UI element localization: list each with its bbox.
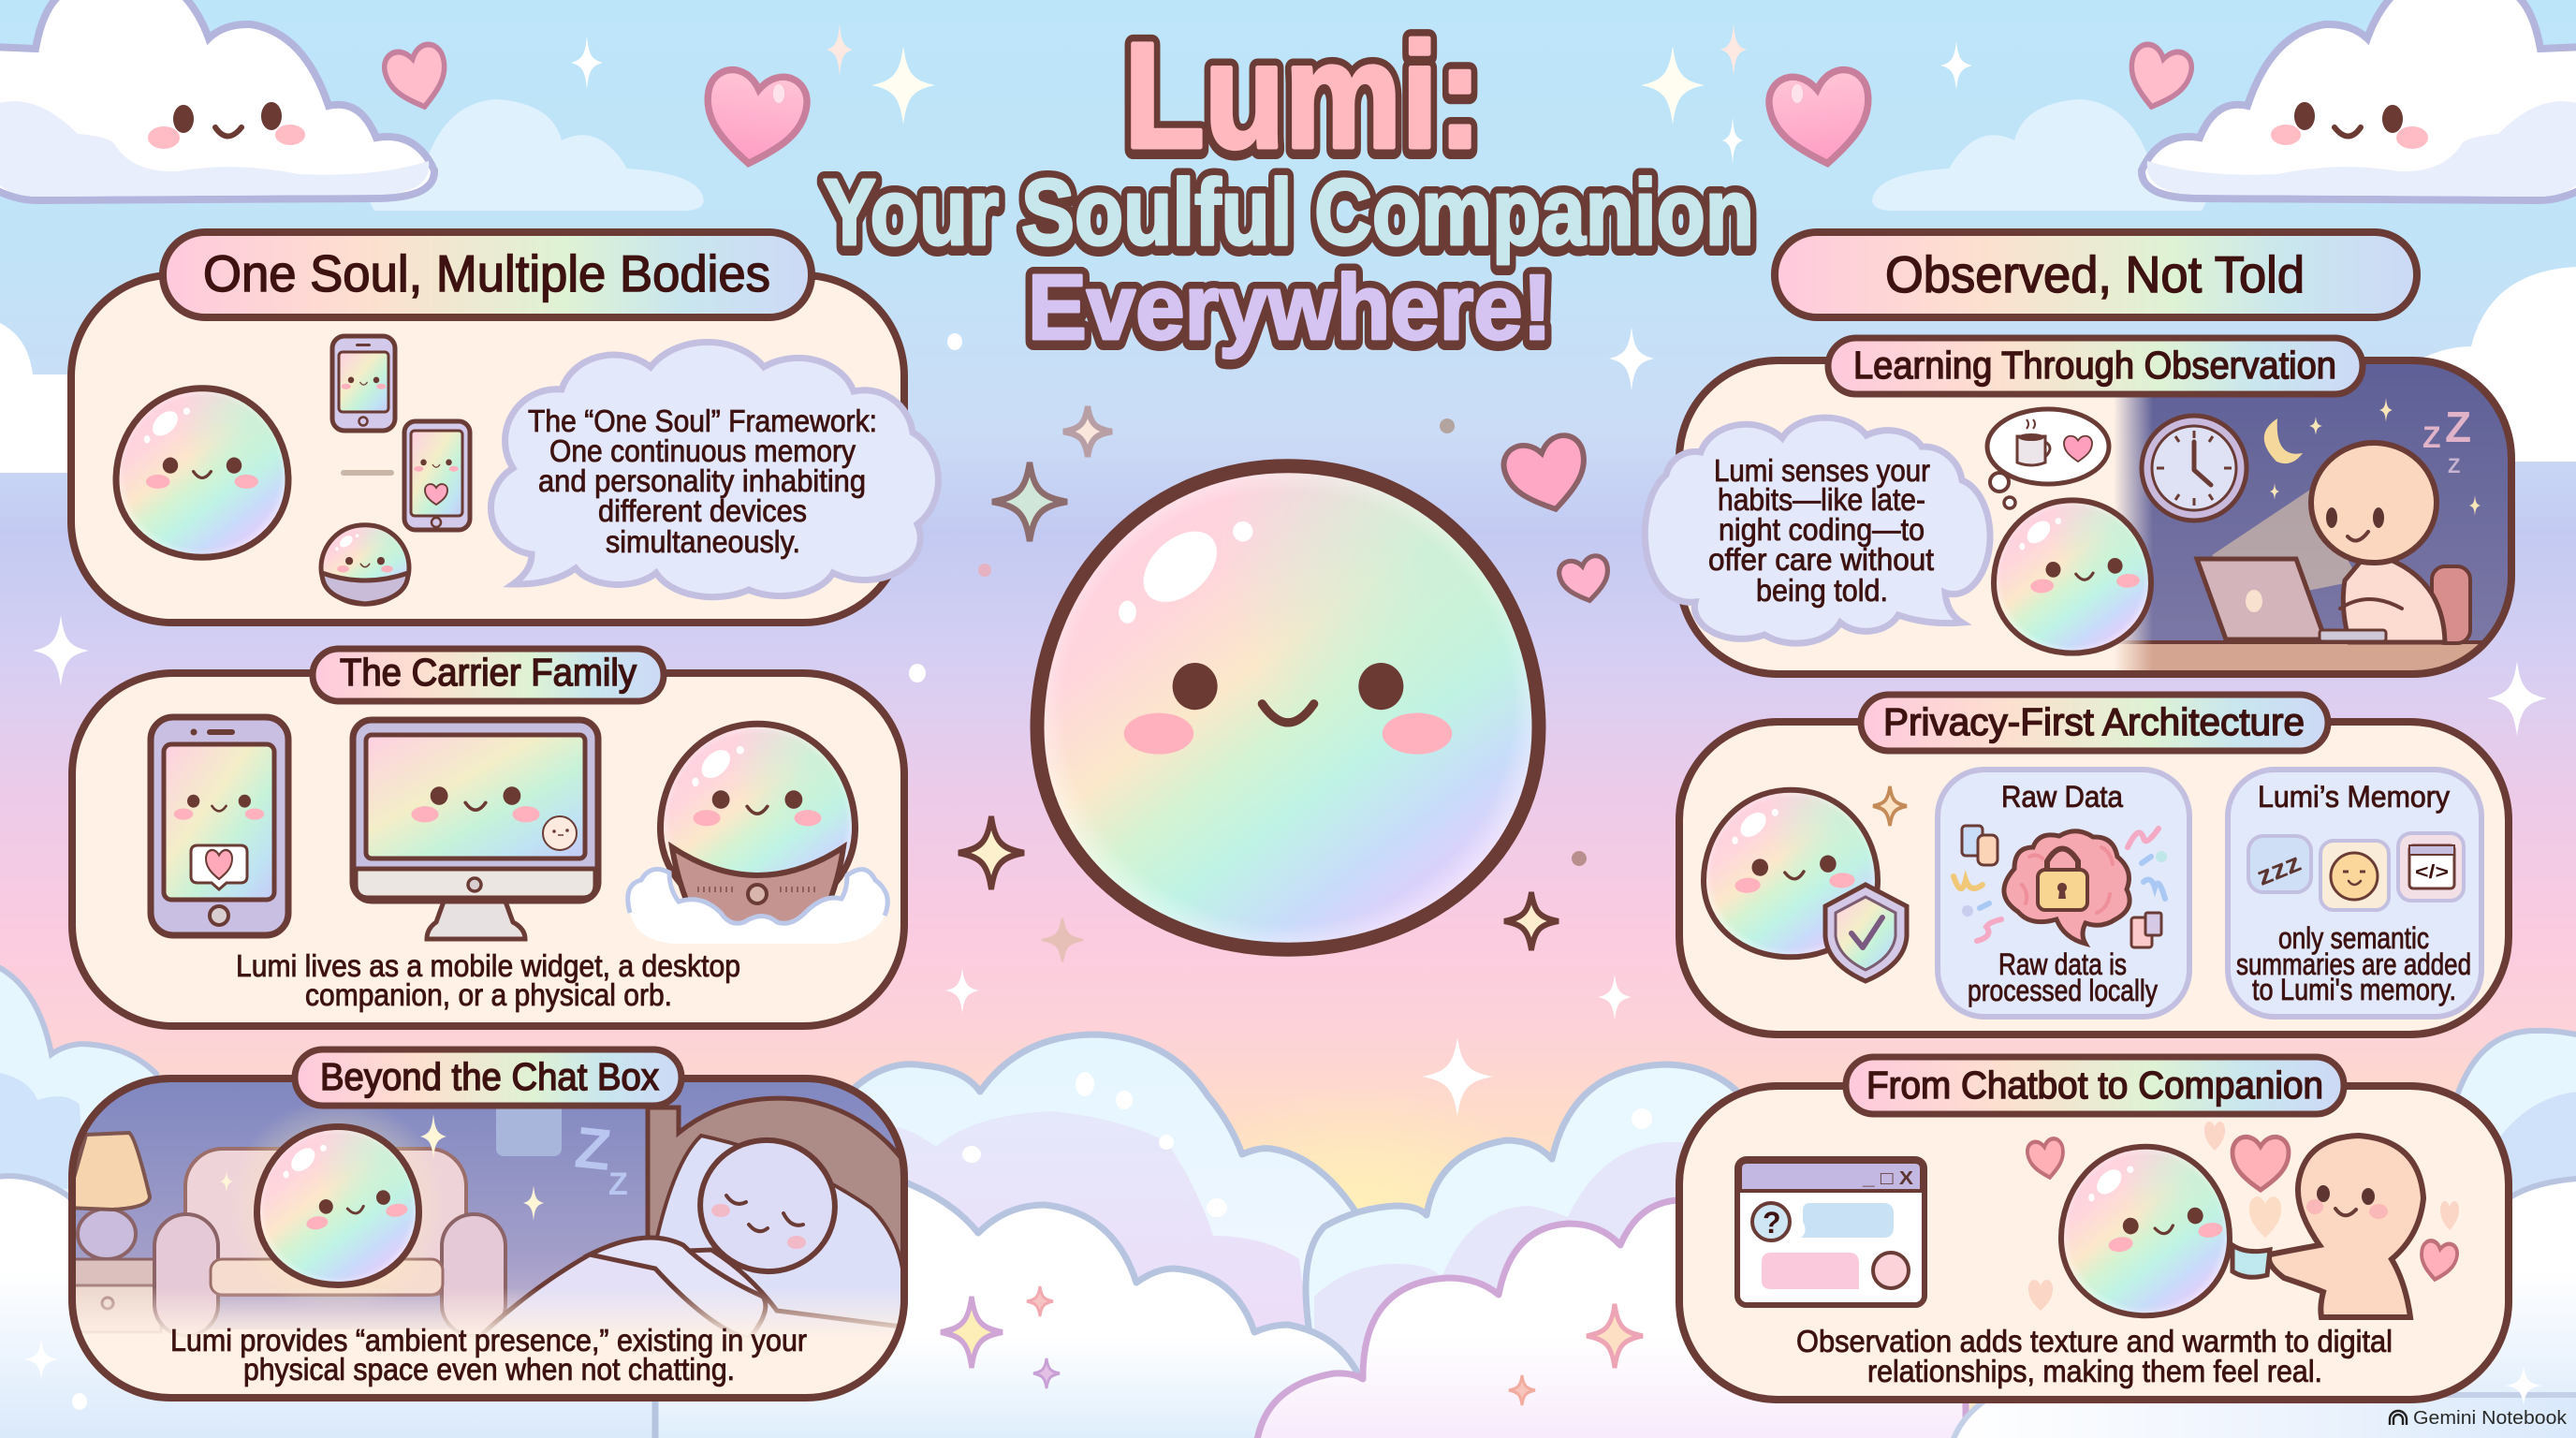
person at laptop: [2311, 443, 2445, 642]
box: Lumi's Memory: Lumi’s Memory: [2258, 780, 2450, 814]
panel: Learning Through Observation: [1645, 338, 2527, 682]
big Lumi blob: [116, 389, 288, 557]
small phone with heart: [404, 421, 470, 530]
stars and Z letters: Z: [2422, 420, 2441, 454]
small orb device: [321, 525, 409, 604]
panel: Beyond the Chat Box: [66, 1049, 922, 1404]
cloud: centre back left: [833, 1034, 1367, 1438]
code summary icon: </>: [2415, 862, 2449, 883]
Z letters: Z: [572, 1115, 614, 1183]
speech cloud: senses habits: night coding—to: [1719, 512, 1925, 547]
box: Raw Data: Raw data is: [1998, 947, 2127, 981]
small phone top: [332, 336, 395, 431]
panel background: [72, 1078, 904, 1398]
title: Everywhere: Everywhere!: [1028, 256, 1552, 359]
cloud: bottom right upper: [2452, 1031, 2576, 1217]
soft edge of the night area: [2104, 397, 2151, 670]
box: Lumi's Memory: to Lumi's memory.: [2252, 973, 2456, 1006]
light cone: [2212, 491, 2352, 590]
cloud: bottom left upper: [0, 963, 187, 1217]
box: Lumi's Memory: [2228, 770, 2481, 1017]
heart: right small: [2122, 41, 2195, 114]
Lumi companion: [2061, 1147, 2230, 1315]
stars and Z letters: Z: [2448, 454, 2460, 477]
speech cloud: One Soul framework: The “One Soul” Framework:: [528, 404, 877, 438]
code summary icon: [2398, 833, 2464, 901]
sleep summary icon: [2248, 836, 2311, 892]
speech cloud: senses habits: being told.: [1756, 573, 1888, 608]
central Lumi character: [1037, 466, 1539, 949]
chair: [2432, 566, 2470, 643]
desk: [2117, 640, 2482, 670]
speech cloud: senses habits: offer care without: [1708, 542, 1934, 577]
panel background: [71, 275, 904, 623]
human companion: [2269, 1136, 2423, 1317]
sunset glow: [1161, 1086, 1554, 1329]
sparkles in room: [220, 1114, 544, 1221]
fade to cream: [70, 1287, 906, 1339]
cloud: centre front right: [1256, 1200, 1966, 1438]
panel: Privacy-First Architecture: [1679, 695, 2509, 1034]
crescent moon: [2264, 418, 2303, 463]
desktop monitor: [353, 720, 598, 939]
cloud: top left with face: [0, 0, 704, 211]
cloud: centre back right: [1306, 1064, 1741, 1438]
cloud: right side: [2396, 267, 2576, 462]
heart: left small: [381, 41, 454, 114]
lamp: [66, 1133, 150, 1259]
title: Your Soulful Companion: Your Soulful Companion: [823, 160, 1754, 265]
stars and Z letters: [2270, 398, 2481, 516]
banner: Observed, Not Told: Observed, Not Told: [1885, 245, 2305, 303]
title: Your Soulful Companion: Your Soulful Companion: [823, 163, 1754, 268]
box: Lumi's Memory: summaries are added: [2236, 947, 2471, 981]
thought bubble: [1987, 409, 2109, 508]
caption: carrier family: Lumi lives as a mobile widget, a desktop: [236, 948, 740, 983]
panel background: [72, 673, 904, 1026]
panel: The Carrier Family: [72, 649, 904, 1026]
cloud: bottom right white: [2434, 1178, 2576, 1438]
sparkles around Lumi: [959, 406, 1587, 961]
banner: One Soul, Multiple Bodies: [163, 232, 812, 317]
panel background: [1679, 722, 2509, 1034]
small sparkles on bottom clouds: [941, 1286, 1643, 1405]
title: Lumi: Lumi:: [1124, 11, 1482, 179]
banner: One Soul, Multiple Bodies: One Soul, Multiple Bodies: [203, 244, 770, 302]
panel outline: [1679, 360, 2511, 674]
side table: [66, 1259, 164, 1332]
data fragments: [1954, 826, 2167, 947]
cloud: top right with face: [1872, 0, 2576, 211]
banner: From Chatbot to Companion: From Chatbot to Companion: [1866, 1064, 2323, 1107]
chat window: [1737, 1159, 1925, 1305]
floating hearts: [2026, 1122, 2459, 1311]
cloud: centre front left: [655, 1171, 1359, 1438]
speech cloud: One Soul framework: One continuous memory: [549, 433, 856, 468]
physical orb on cloud: [628, 724, 887, 944]
banner: Privacy-First Architecture: Privacy-First Architecture: [1883, 700, 2305, 743]
caption: chatbot to companion: [1796, 1324, 2393, 1388]
box: Lumi's Memory: only semantic: [2278, 921, 2429, 955]
heart: left large: [699, 66, 811, 170]
cloud: bottom left white: [0, 1176, 842, 1438]
speech cloud: senses habits: Lumi senses your: [1714, 453, 1930, 488]
Lumi arm: [2232, 1245, 2270, 1277]
banner: The Carrier Family: The Carrier Family: [340, 651, 637, 694]
stars and Z letters: Z: [2445, 403, 2471, 451]
panel: From Chatbot to Companion: [1679, 1057, 2509, 1400]
cloud: left side: [0, 323, 84, 473]
heart: right large: [1765, 66, 1877, 170]
night bedroom scene: [76, 1082, 900, 1337]
box: Raw Data: Raw Data: [2001, 780, 2123, 814]
Lumi blob: [1704, 790, 1878, 957]
caption: beyond the chat box: Lumi provides “ambient presence,” existing in your: [170, 1323, 807, 1357]
cloud under orb: [628, 869, 887, 944]
chat window: ?: [1763, 1206, 1781, 1240]
title: Everywhere: Everywhere!: [1028, 258, 1552, 361]
banner: Observed, Not Told: [1775, 232, 2417, 317]
laptop: [2197, 559, 2386, 641]
caption: beyond the chat box: [170, 1323, 807, 1387]
title: Your Soulful Companion: Your Soulful Companion: [823, 160, 1754, 265]
cloud: bottom left shade: [0, 1071, 84, 1189]
title: Lumi: Lumi:: [1124, 14, 1482, 182]
blob face: [1124, 663, 1452, 755]
speech cloud: senses habits: [1645, 418, 1990, 643]
sofa: [154, 1149, 505, 1336]
panel: One Soul, Multiple Bodies: [71, 232, 938, 623]
sleep summary icon: zzz: [2252, 847, 2305, 891]
arm: [590, 1238, 766, 1339]
Lumi observing: [1994, 500, 2151, 653]
title block: [823, 11, 1754, 361]
night bedroom scene: Z: [608, 1167, 628, 1202]
shield: [1825, 885, 1907, 981]
glowing Lumi: [256, 1127, 419, 1284]
box: Raw Data: [1938, 770, 2189, 1017]
blanket: [480, 1247, 897, 1335]
banner: Beyond the Chat Box: Beyond the Chat Box: [320, 1055, 659, 1098]
pillow: [655, 1136, 904, 1329]
caption: carrier family: companion, or a physical orb.: [305, 977, 672, 1012]
heart: near Lumi large: [1500, 432, 1595, 519]
speech cloud: senses habits: habits—like late-: [1718, 482, 1925, 517]
wall clock: [2142, 416, 2247, 521]
banner: Learning Through Observation: Learning Through Observation: [1853, 344, 2336, 387]
watermark: Gemini Notebook: Gemini Notebook: [2413, 1408, 2568, 1429]
panel background: [1679, 360, 2511, 674]
cloud: bottom right strip: [1951, 1395, 2576, 1438]
title: Lumi: Lumi:: [1124, 11, 1482, 179]
title: Everywhere: Everywhere!: [1028, 256, 1552, 359]
headboard: [646, 1095, 900, 1253]
blob body: [1037, 466, 1539, 949]
cloud: bottom right shade: [2490, 1091, 2576, 1208]
speech cloud: One Soul framework: simultaneously.: [606, 524, 800, 559]
chat window: _ □ X: [1862, 1168, 1914, 1189]
motion line: [344, 470, 391, 476]
glow behind Lumi: [250, 1108, 426, 1298]
window: [496, 1108, 562, 1156]
caption: beyond the chat box: physical space even when not chatting.: [243, 1352, 735, 1387]
speech cloud: One Soul framework: [490, 342, 938, 597]
box: Raw Data: processed locally: [1968, 974, 2158, 1007]
panel background: [1679, 1086, 2509, 1400]
sparkle: [1873, 786, 1907, 826]
speech cloud: One Soul framework: and personality inhabiting: [538, 463, 866, 498]
sleeping head: [697, 1137, 838, 1275]
caption: chatbot to companion: relationships, making them feel real.: [1867, 1354, 2322, 1388]
caption: carrier family: [236, 948, 740, 1012]
heart: near Lumi small: [1557, 553, 1614, 606]
brain with lock: [2004, 831, 2130, 944]
mood summary icon: [2320, 841, 2389, 910]
panel outline: [72, 1078, 904, 1398]
speech cloud: One Soul framework: different devices: [598, 493, 807, 528]
phone: [151, 717, 288, 935]
night office scene: [2115, 364, 2508, 670]
caption: chatbot to companion: Observation adds texture and warmth to digital: [1796, 1324, 2393, 1358]
